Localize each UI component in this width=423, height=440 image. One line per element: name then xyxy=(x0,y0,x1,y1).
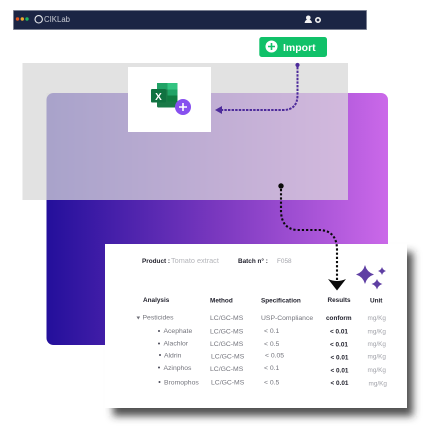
table headers: Analysis xyxy=(143,297,170,304)
row: azinphos: < 0.01 xyxy=(330,368,349,374)
arrow: panel to results xyxy=(278,183,346,290)
row: alachlor: mg/Kg xyxy=(368,341,386,348)
grey screen panel xyxy=(22,63,348,200)
row: aldrin xyxy=(159,352,386,362)
row: pesticides xyxy=(136,314,386,322)
row: azinphos: mg/Kg xyxy=(368,367,386,374)
row: azinphos: Azinphos xyxy=(164,365,192,372)
import button xyxy=(259,37,327,57)
row: bromophos: < 0.01 xyxy=(330,380,349,387)
app header bar xyxy=(14,10,366,30)
CIKLab logo: CIKLab xyxy=(44,15,71,24)
table headers: Unit xyxy=(370,298,383,304)
table headers: Results xyxy=(328,297,351,304)
row: alachlor: < 0.5 xyxy=(264,341,280,348)
import button: Import xyxy=(283,42,316,54)
row: aldrin: < 0.01 xyxy=(330,354,349,362)
icon: sparkles xyxy=(356,265,386,290)
row: acephate xyxy=(158,328,386,336)
row: pesticides: mg/Kg xyxy=(368,315,386,322)
table headers xyxy=(143,297,383,304)
row: azinphos xyxy=(158,365,386,374)
product line: Tomato extract xyxy=(171,256,219,265)
results document xyxy=(105,244,407,408)
row: aldrin: < 0.05 xyxy=(265,352,284,360)
row: acephate: < 0.1 xyxy=(264,328,280,335)
row: pesticides: conform xyxy=(326,315,352,322)
row: bromophos: < 0.5 xyxy=(264,380,280,386)
row: bromophos: mg/Kg xyxy=(368,380,387,388)
window control dots xyxy=(16,17,29,21)
row: bromophos xyxy=(158,380,387,388)
row: aldrin: mg/Kg xyxy=(368,354,386,360)
row: aldrin: LC/GC-MS xyxy=(211,354,245,360)
product line: F058 xyxy=(277,258,292,265)
product line: Product : xyxy=(142,258,170,265)
icon: plus circle xyxy=(266,40,278,52)
row: azinphos: LC/GC-MS xyxy=(210,366,244,373)
row: acephate: < 0.01 xyxy=(330,328,348,336)
arrow: import to excel xyxy=(215,63,300,114)
row: alachlor: < 0.01 xyxy=(330,342,348,348)
row: acephate: mg/Kg xyxy=(368,328,386,336)
row: bromophos: LC/GC-MS xyxy=(211,380,245,386)
icon: settings gear xyxy=(316,18,320,22)
table headers: Specification xyxy=(261,298,301,304)
icon: excel: X xyxy=(155,92,162,103)
row: alachlor: Alachlor xyxy=(164,340,189,348)
row: acephate: Acephate xyxy=(164,328,192,335)
row: aldrin: Aldrin xyxy=(164,352,182,360)
row: bromophos: Bromophos xyxy=(164,380,199,386)
translucent grey overlap xyxy=(46,93,348,200)
row: pesticides: Pesticides xyxy=(142,314,174,322)
table headers: Method xyxy=(210,298,233,304)
row: pesticides: USP-Compliance xyxy=(261,315,313,322)
product line xyxy=(142,256,292,265)
row: acephate: LC/GC-MS xyxy=(210,328,244,336)
row: pesticides: LC/GC-MS xyxy=(210,315,244,322)
icon: purple plus xyxy=(175,99,191,115)
product line: Batch n° : xyxy=(238,257,268,265)
icon: user xyxy=(305,15,312,23)
document shadow xyxy=(113,252,413,416)
row: alachlor: LC/GC-MS xyxy=(210,341,244,348)
row: alachlor xyxy=(158,340,386,348)
row: azinphos: < 0.1 xyxy=(264,365,280,372)
purple gradient panel xyxy=(46,93,388,345)
excel tile xyxy=(128,67,211,132)
